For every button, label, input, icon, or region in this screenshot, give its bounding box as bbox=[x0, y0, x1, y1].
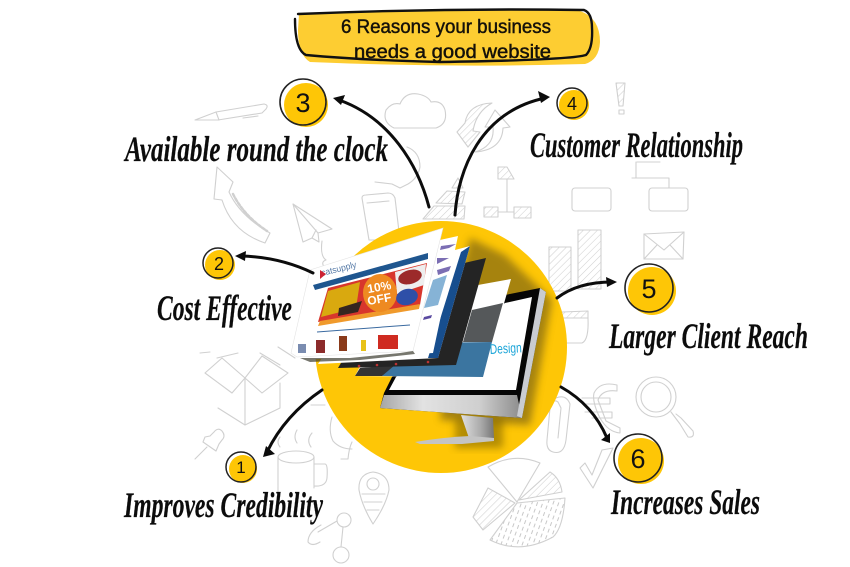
badge 6 bbox=[614, 434, 664, 484]
label 3: Available round the clock bbox=[124, 129, 388, 169]
soda logos bbox=[394, 267, 423, 308]
icon: cloud bbox=[385, 94, 446, 128]
badge 5 bbox=[625, 264, 676, 315]
label 6: Increases Sales bbox=[610, 482, 760, 522]
icon: exclamation mark bbox=[616, 83, 625, 114]
arrow: to 6 bbox=[561, 387, 610, 443]
label 1: Improves Credibility bbox=[123, 485, 324, 525]
web page 3 bbox=[318, 246, 470, 364]
arrow: to 4 bbox=[455, 91, 550, 215]
icon: open box bbox=[200, 347, 295, 425]
reason 2 bbox=[157, 248, 292, 328]
icon: refresh arrows bbox=[457, 103, 510, 152]
arrow: to 1 bbox=[263, 390, 322, 457]
background sketches bbox=[195, 83, 693, 563]
banner bbox=[318, 263, 427, 322]
reason 5 bbox=[608, 264, 808, 356]
icon: pen bbox=[195, 104, 267, 120]
icon: smartphone bbox=[362, 193, 400, 240]
web page 5: Design bbox=[489, 339, 522, 357]
yellow circle bbox=[315, 221, 567, 473]
icon: network nodes bbox=[308, 513, 351, 563]
title banner bbox=[295, 10, 600, 66]
products bbox=[298, 335, 398, 353]
web page 1 bbox=[291, 228, 443, 362]
badge 3 bbox=[280, 79, 328, 127]
icon: envelope bbox=[644, 232, 684, 259]
reason 4 bbox=[530, 88, 743, 165]
badge 3: 3 bbox=[295, 88, 311, 118]
reason 1 bbox=[123, 452, 324, 525]
web page 2 bbox=[300, 236, 458, 360]
icon: pyramid bbox=[423, 178, 465, 219]
icon: coffee mug bbox=[278, 430, 327, 494]
badge 1 bbox=[226, 452, 257, 483]
monitor bbox=[380, 238, 552, 448]
arrow: to 2 bbox=[235, 251, 313, 273]
blue nav bar bbox=[313, 253, 428, 290]
icon: up arrow bbox=[214, 167, 270, 243]
badge 2: 2 bbox=[214, 254, 224, 274]
badge 6: 6 bbox=[630, 444, 646, 474]
icon: paper clip bbox=[547, 397, 570, 452]
discount badge: 10% bbox=[366, 278, 393, 296]
icon: hanging bulb bbox=[311, 405, 352, 459]
flow diagram small bbox=[484, 167, 531, 218]
icon: paper plane bbox=[293, 204, 332, 268]
badge 5: 5 bbox=[641, 274, 657, 304]
title line 1: 6 Reasons your business bbox=[341, 17, 551, 38]
badge 1: 1 bbox=[236, 458, 246, 477]
discount badge bbox=[363, 274, 397, 312]
badge 4: 4 bbox=[567, 94, 577, 114]
discount badge: OFF bbox=[366, 290, 392, 308]
bar chart sketch bbox=[549, 230, 601, 291]
badge 4 bbox=[557, 88, 589, 120]
icon: folder tray bbox=[560, 311, 588, 343]
title line 2: needs a good website bbox=[354, 42, 551, 63]
web page 4 bbox=[338, 258, 486, 368]
reason 6 bbox=[610, 434, 760, 522]
logo: catsupply bbox=[320, 259, 358, 278]
label 2: Cost Effective bbox=[157, 288, 292, 328]
illustration: monitor and stacked web pages bbox=[291, 228, 552, 448]
pie chart sketch bbox=[473, 458, 565, 547]
monitor stand bbox=[415, 415, 494, 444]
icon: map pin bbox=[359, 472, 389, 524]
web page 5 bbox=[355, 279, 522, 377]
arrow: to 3 bbox=[333, 95, 429, 207]
icon: check mark bbox=[580, 448, 613, 488]
arrow: to 5 bbox=[557, 277, 617, 298]
icon: euro sign bbox=[582, 384, 620, 433]
reason 3 bbox=[124, 79, 388, 169]
icon: magnifying glass bbox=[636, 377, 693, 437]
icon: push pin bbox=[195, 429, 224, 459]
flow diagram large bbox=[572, 162, 688, 211]
icon: speech bubble bbox=[375, 147, 420, 188]
monitor bezel bbox=[380, 288, 546, 418]
